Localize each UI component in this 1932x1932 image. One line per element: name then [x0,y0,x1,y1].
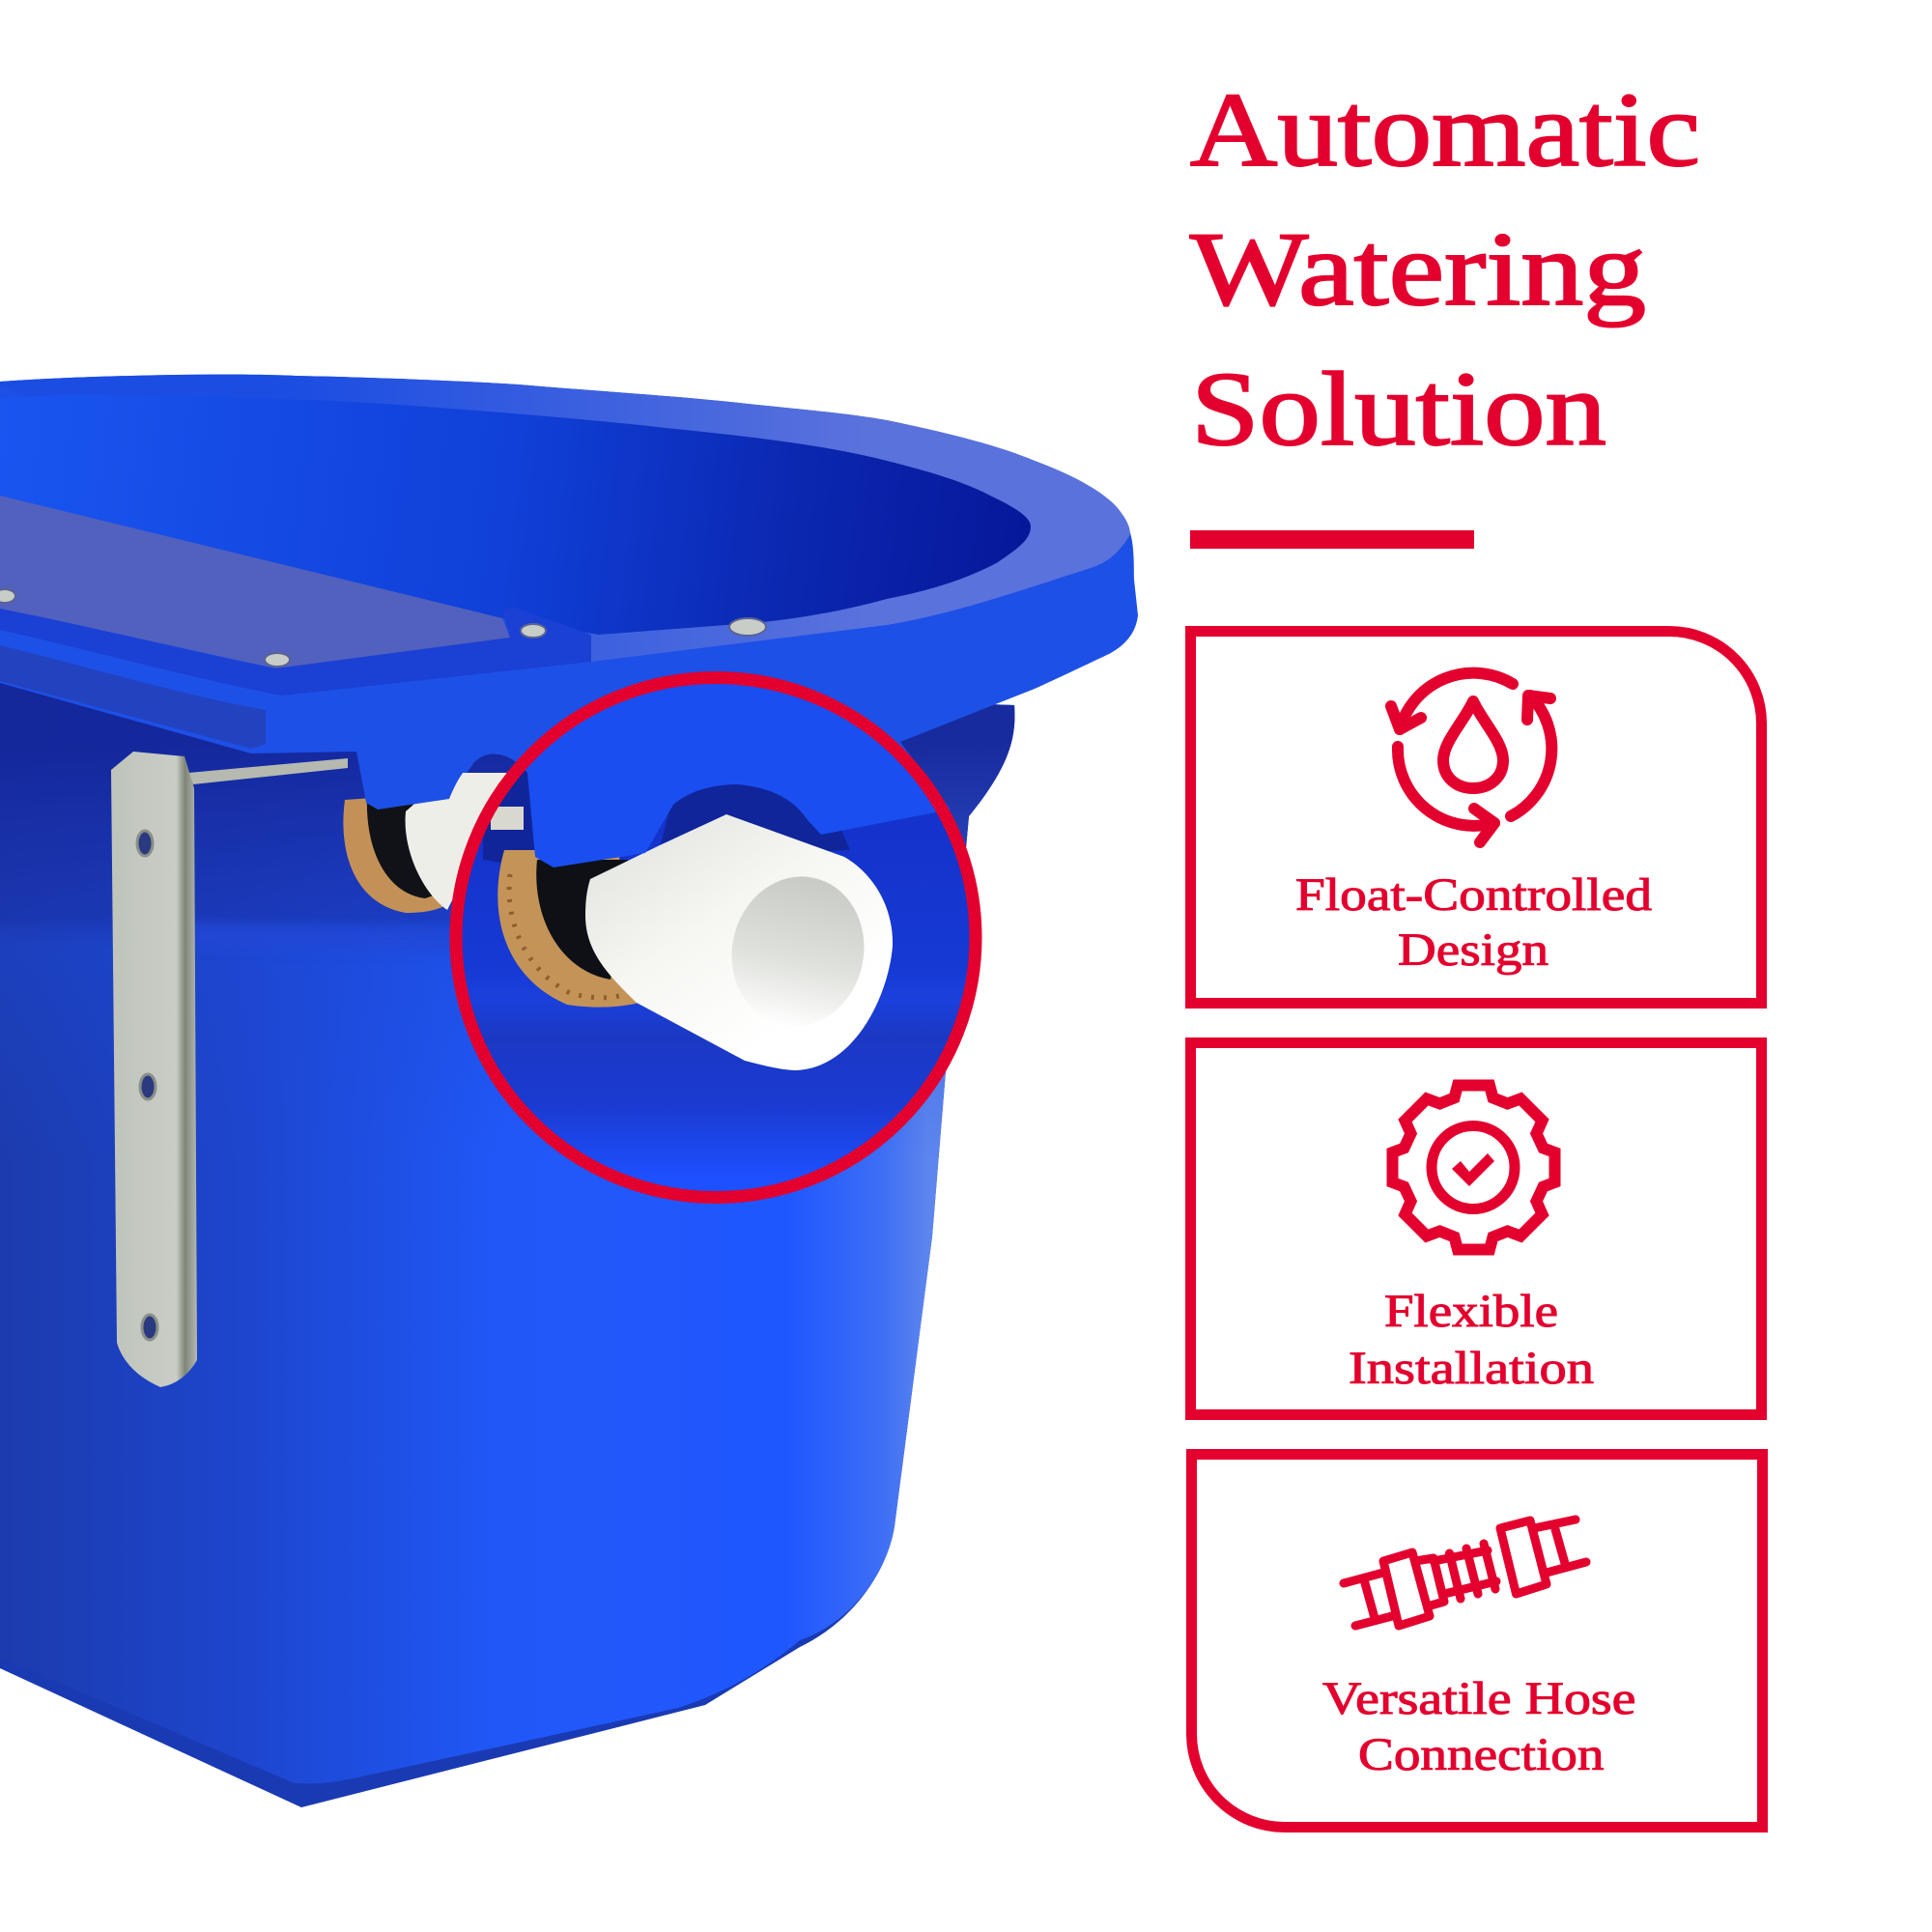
nipple cork washer [497,850,639,1008]
silver stub [491,807,524,830]
rim top face [0,375,1130,662]
rear fitting [343,773,510,913]
bucket rim [0,375,1138,867]
panel: versatile hose connection [1192,1455,1762,1828]
white fitting [585,814,893,1070]
title: Solution [1191,351,1606,468]
magnified hose connector detail [462,684,970,1179]
inner bowl [0,395,1031,635]
notch shadow [483,768,850,869]
icon: gear with check [1393,1086,1555,1250]
panel: flexible installation [1190,1043,1762,1414]
title: Watering [1190,211,1646,327]
label: Float-Controlled [1295,869,1652,921]
label: Connection [1358,1729,1604,1780]
rim and tab over fitting [526,684,936,867]
title [1190,71,1700,468]
bucket body [0,667,1024,1807]
metal bracket [111,752,348,1387]
label: Flexible [1384,1286,1558,1337]
raised cover edge [0,607,591,696]
label [1295,869,1652,976]
icon: water drop in recycling arrows [1391,673,1551,842]
label [1322,1673,1636,1780]
fitting bore [732,876,864,1020]
lens background [462,812,970,1179]
lower rim band [0,645,266,749]
label: Installation [1349,1343,1594,1394]
cork texture [509,874,623,998]
product photo: blue bucket [0,375,1138,1807]
screws [0,589,766,667]
title underline [1190,530,1474,549]
label [1349,1286,1594,1394]
icon: hose connector [1344,1520,1586,1626]
label: Design [1398,924,1548,976]
title: Automatic [1190,71,1700,188]
label: Versatile Hose [1322,1673,1636,1724]
panel: float-controlled design [1190,632,1762,1003]
nipple gasket [536,860,628,980]
callout circle [456,678,976,1198]
rear tab [356,676,580,810]
float cover panel [0,496,510,668]
